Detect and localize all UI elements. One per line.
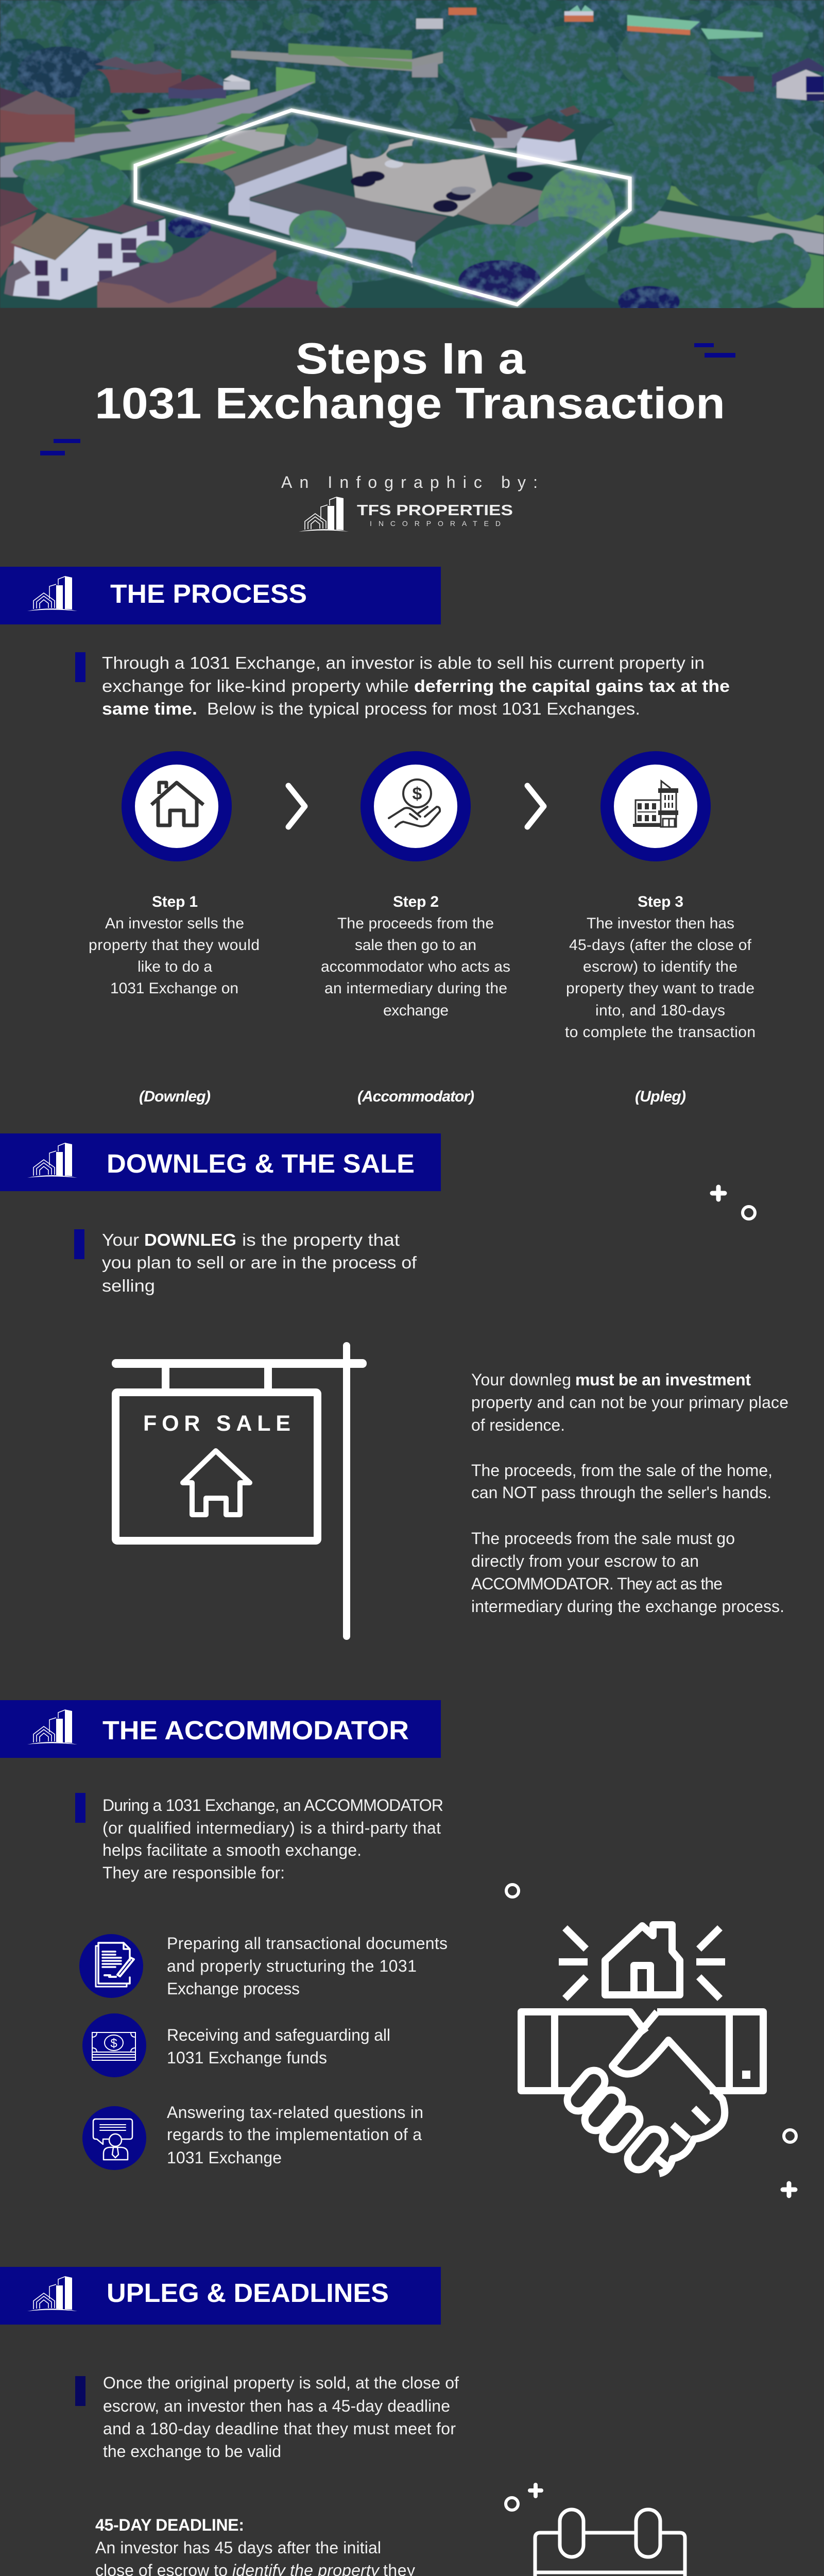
panel: the accommodator — [0, 1700, 796, 2196]
downleg details text: must be an investment — [575, 1370, 751, 1389]
section header — [0, 1700, 441, 1758]
upper road and grass — [231, 43, 443, 96]
intro text: They are responsible for: — [102, 1863, 285, 1882]
decorative rings and plus — [506, 1885, 796, 2196]
section header — [0, 567, 441, 624]
intro text: escrow, an investor then has a 45-day deadline — [103, 2397, 450, 2415]
intro text: (or qualified intermediary) is a third-party that — [102, 1819, 441, 1837]
background buildings, right — [416, 5, 824, 101]
parked cars — [350, 159, 534, 213]
step 1 text: 1031 Exchange on — [110, 980, 238, 997]
company logo: INCORPORATED — [370, 519, 501, 528]
intro text: deferring the capital gains tax at the — [414, 677, 730, 696]
45-day deadline text: 45-DAY DEADLINE: — [95, 2516, 244, 2534]
company logo — [299, 497, 513, 532]
downleg details text: Your downleg — [471, 1370, 571, 1389]
icon: document — [79, 1934, 143, 1998]
list text 1 — [167, 1934, 448, 1998]
icon: calendar and clock — [535, 2510, 754, 2576]
step 1 text: (Downleg) — [139, 1088, 211, 1105]
company logo: TFS PROPERTIES — [357, 502, 513, 519]
step 1 text: property that they would — [89, 937, 260, 954]
intro text: During a 1031 Exchange, an ACCOMMODATOR — [102, 1796, 443, 1815]
right houses — [469, 105, 581, 168]
panel: the process — [0, 567, 756, 1105]
step 3 text: Step 3 — [638, 893, 683, 910]
panel: downleg and the sale — [0, 1133, 788, 1640]
icon: handshake and house — [521, 1925, 763, 2174]
intro text — [75, 652, 730, 719]
intro text: same time. — [102, 700, 197, 719]
45-day deadline text — [95, 2516, 415, 2576]
intro text: you plan to sell or are in the process of — [102, 1253, 417, 1273]
icon: for sale sign — [112, 1342, 367, 1640]
step 2 text: sale then go to an — [355, 937, 476, 954]
step 2 text: exchange — [383, 1002, 449, 1019]
list text 1: Preparing all transactional documents — [167, 1934, 448, 1953]
section header: THE ACCOMMODATOR — [102, 1716, 409, 1745]
downleg details text: of residence. — [471, 1416, 565, 1434]
title block — [40, 334, 735, 532]
bottom left houses — [0, 189, 347, 308]
intro text — [74, 1229, 417, 1296]
intro text: Below is the typical process for most 1031 Exchanges. — [207, 700, 640, 719]
panel: upleg and deadlines — [0, 2267, 763, 2576]
step 2 text: an intermediary during the — [324, 980, 507, 997]
intro text: Your — [102, 1231, 139, 1250]
apartments inside outline — [206, 138, 543, 268]
icon: buildings circle — [600, 751, 711, 861]
foreground trees — [13, 13, 824, 317]
step 1 text: An investor sells the — [105, 915, 244, 932]
byline: An Infographic by: — [281, 473, 538, 492]
step 3 text: escrow) to identify the — [583, 958, 737, 975]
list text 3: Answering tax-related questions in — [167, 2103, 423, 2122]
decorative dashes — [40, 343, 735, 455]
arrow — [527, 786, 544, 827]
property outline — [135, 110, 630, 304]
intro text: helps facilitate a smooth exchange. — [102, 1841, 362, 1859]
list text 2: 1031 Exchange funds — [167, 2048, 327, 2067]
step 2 text: The proceeds from the — [337, 915, 494, 932]
left houses — [0, 57, 250, 142]
section header — [0, 1133, 441, 1191]
title: Steps In a — [296, 334, 526, 383]
step 2 text — [321, 893, 510, 1105]
section header — [0, 2267, 441, 2325]
step 2 text: accommodator who acts as — [321, 958, 510, 975]
icon: house circle — [122, 751, 232, 861]
icon: advisor with speech bubble — [82, 2106, 146, 2170]
icon: money in hand circle — [360, 751, 471, 861]
icon: money stack: $ — [110, 2037, 117, 2050]
step 3 text: property they want to trade — [566, 980, 754, 997]
arrow — [288, 786, 305, 827]
icon: money stack — [82, 2013, 146, 2077]
intro text: the exchange to be valid — [103, 2442, 281, 2461]
list text 3: regards to the implementation of a — [167, 2125, 422, 2144]
intro text: exchange for like-kind property while — [102, 677, 409, 696]
step 2 text: Step 2 — [393, 893, 439, 910]
aerial photo of the property — [0, 0, 824, 317]
step 3 text: 45-days (after the close of — [569, 937, 752, 954]
decorative rings and plus — [506, 2485, 763, 2576]
right road and grass — [618, 185, 824, 308]
downleg details text: can NOT pass through the seller's hands. — [471, 1483, 771, 1502]
intro text — [75, 2374, 459, 2461]
45-day deadline text: An investor has 45 days after the initial — [95, 2538, 381, 2557]
lot with grass — [175, 124, 494, 216]
section header: DOWNLEG & THE SALE — [107, 1149, 415, 1178]
downleg details text: The proceeds from the sale must go — [471, 1529, 735, 1548]
step 3 text: (Upleg) — [635, 1088, 686, 1105]
downleg details text — [471, 1370, 788, 1616]
downleg details text: The proceeds, from the sale of the home, — [471, 1461, 772, 1480]
downleg details text: property and can not be your primary place — [471, 1393, 788, 1412]
icon: money in hand circle: $ — [413, 784, 422, 804]
intro text: is the property that — [242, 1231, 400, 1250]
intro text: Through a 1031 Exchange, an investor is able to sell his current property in — [102, 654, 705, 673]
downleg details text: ACCOMMODATOR. They act as the — [471, 1574, 723, 1593]
title: 1031 Exchange Transaction — [95, 379, 725, 428]
section header: THE PROCESS — [110, 579, 307, 608]
intro text: DOWNLEG — [144, 1231, 236, 1250]
list text 2 — [167, 2026, 390, 2067]
intro text: selling — [102, 1277, 155, 1296]
step 1 text: Step 1 — [152, 893, 198, 910]
title — [95, 334, 725, 428]
list text 2: Receiving and safeguarding all — [167, 2026, 390, 2044]
downleg details text: intermediary during the exchange process. — [471, 1597, 784, 1616]
list text 3 — [167, 2103, 423, 2167]
step 3 text: into, and 180-days — [595, 1002, 725, 1019]
step 3 text — [565, 893, 756, 1105]
list text 1: and properly structuring the 1031 — [167, 1957, 417, 1975]
list text 3: 1031 Exchange — [167, 2148, 282, 2167]
step 2 text: (Accommodator) — [357, 1088, 474, 1105]
intro text: Once the original property is sold, at the close of — [103, 2374, 459, 2392]
decorative plus and ring — [712, 1187, 755, 1219]
section header: UPLEG & DEADLINES — [107, 2278, 389, 2308]
step 1 text: like to do a — [138, 958, 212, 975]
step 1 text — [89, 893, 260, 1105]
icon: for sale sign: FOR SALE — [143, 1411, 290, 1436]
list text 1: Exchange process — [167, 1979, 300, 1998]
far background canopy — [0, 0, 824, 124]
step 3 text: The investor then has — [587, 915, 734, 932]
step 3 text: to complete the transaction — [565, 1024, 756, 1041]
downleg details text: directly from your escrow to an — [471, 1552, 699, 1570]
main road — [0, 81, 315, 177]
intro text: and a 180-day deadline that they must meet for — [103, 2419, 456, 2438]
intro text — [75, 1793, 443, 1882]
